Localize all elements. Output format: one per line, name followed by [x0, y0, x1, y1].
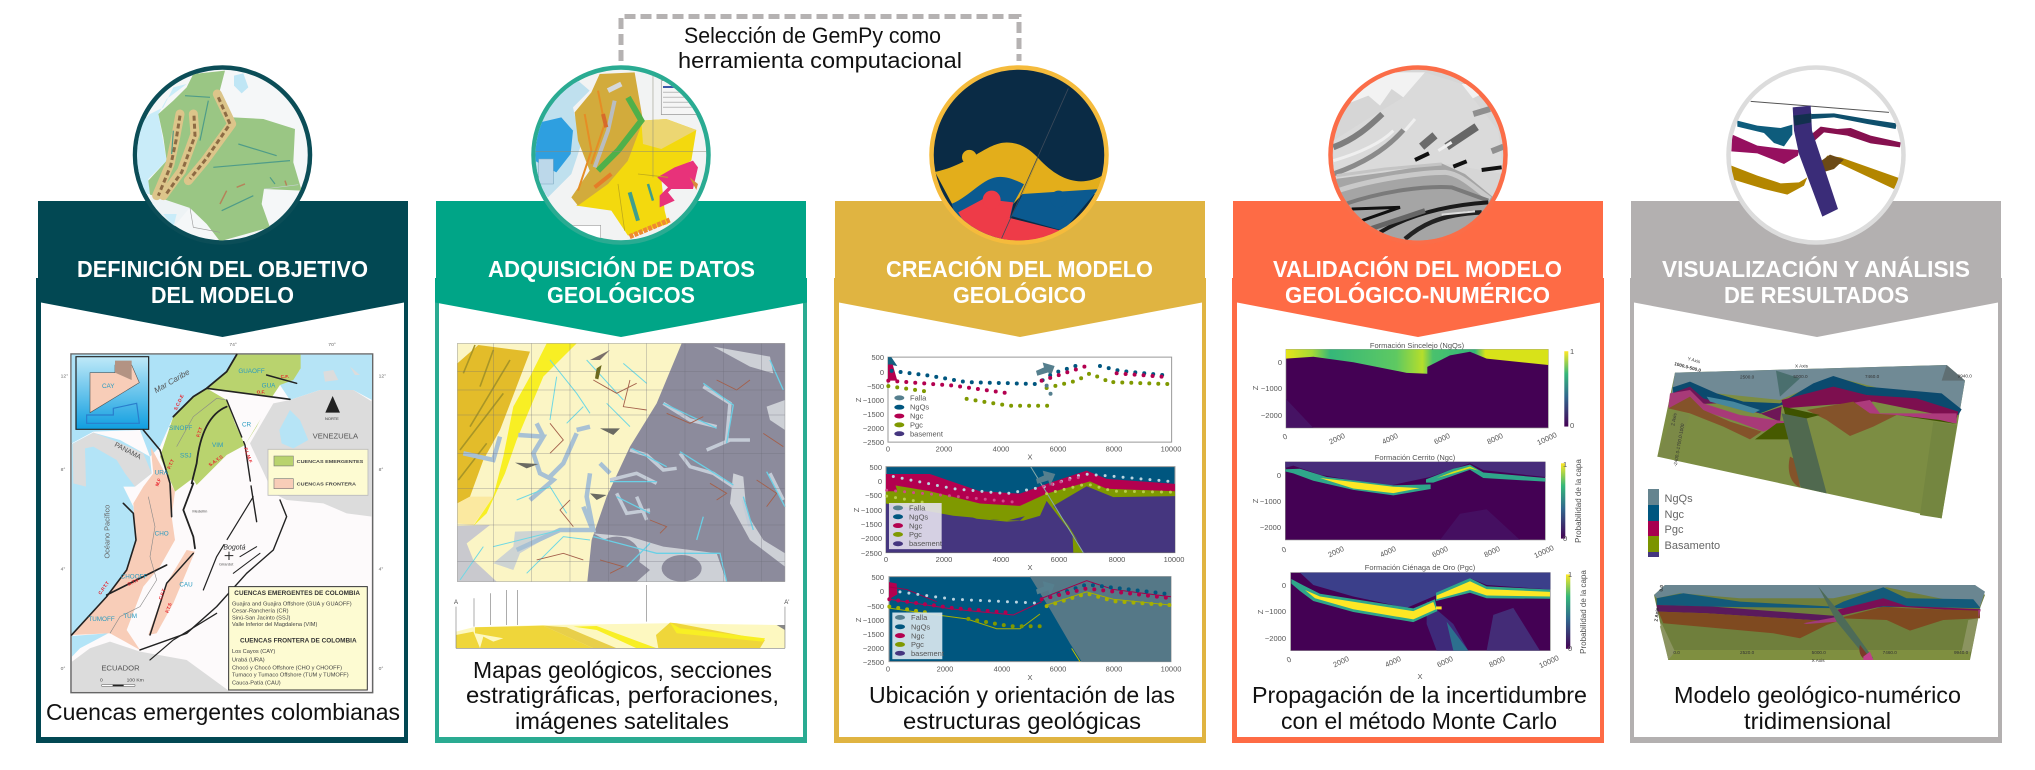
- chart: Cerrito probability: Formación Cerrito (Ngc): [1375, 453, 1456, 462]
- chart: Cerrito probability: 1: [1563, 460, 1567, 469]
- chart: interpolated layers: basement: [909, 539, 943, 548]
- caption: validation: Propagación de la incertidumbre: [1252, 682, 1587, 708]
- chart: interpolated layers: −2000: [861, 534, 882, 543]
- text box: basin list: Cauca-Patía (CAU): [232, 680, 281, 686]
- chart: interpolated layers: 4000: [993, 555, 1009, 564]
- chart: scalar field contour: 0: [880, 587, 884, 596]
- map: Colombian basins: 0°: [379, 666, 383, 672]
- chart: scalar field contour: Z: [854, 617, 863, 622]
- panel: geological model creation: [834, 68, 1206, 743]
- chart: scalar field contour: 8000: [1106, 664, 1122, 674]
- chart: input points: −2500: [863, 438, 884, 447]
- chart: interpolated layers: X: [1027, 563, 1033, 572]
- chart: input points: [854, 353, 1181, 462]
- chart: geological cross-section: A': [784, 600, 789, 606]
- chart: Sincelejo probability: 8000: [1485, 431, 1504, 446]
- caption: validation: con el método Monte Carlo: [1281, 708, 1557, 734]
- chart: Cerrito probability: 0: [1563, 534, 1567, 543]
- chart: scalar field contour: −2500: [863, 658, 884, 667]
- panel: visualization: [1630, 68, 2002, 743]
- chart: Sincelejo probability: 4000: [1380, 431, 1399, 446]
- panel: model validation: [1232, 68, 1604, 743]
- chart: interpolated layers: NgQs: [909, 512, 928, 522]
- map: Colombian basins: TUMOFF: [88, 616, 115, 623]
- panel frame: [435, 278, 807, 743]
- icon: 3D layers and fault: [1728, 68, 1904, 242]
- map: Colombian basins: CHO: [155, 531, 169, 538]
- chart: interpolated layers: 0: [884, 555, 888, 564]
- map: Colombian basins: 74°: [229, 342, 237, 348]
- chart: Ciénaga de Oro probability: 4000: [1383, 654, 1402, 669]
- chart: Sincelejo probability: Formación Sincelejo (NgQs): [1370, 341, 1465, 350]
- chart: Ciénaga de Oro probability: 8000: [1487, 654, 1506, 669]
- chart: input points: 8000: [1106, 444, 1122, 454]
- chart: Sincelejo probability: −2000: [1261, 411, 1282, 420]
- text box: basin list: Chocó y Chocó Offshore (CHO y CHOOFF): [232, 666, 342, 672]
- chart: Ciénaga de Oro probability: Z: [1256, 609, 1265, 614]
- icon: grey folded strata: [1330, 68, 1506, 242]
- chart: Ciénaga de Oro probability: [1256, 563, 1588, 681]
- chart: Sincelejo probability: Z: [1251, 385, 1260, 390]
- map: Colombian basins: Girardot: [219, 561, 234, 566]
- chart: interpolated layers: [852, 463, 1184, 572]
- chart: interpolated layers: 8000: [1109, 555, 1125, 564]
- map: Colombian basins: 70°: [328, 342, 336, 348]
- map: Colombian basins: NORTE: [325, 416, 339, 421]
- chart: Sincelejo probability: 0: [1281, 432, 1289, 442]
- chart: input points: −2000: [863, 424, 884, 433]
- chart: Sincelejo probability: 6000: [1432, 431, 1451, 446]
- legend: formations: Ngc: [1664, 509, 1685, 521]
- chart: interpolated layers: 10000: [1164, 555, 1184, 564]
- chart: scalar field contour: 10000: [1161, 664, 1181, 674]
- chart: 3D model: 2500.0: [1740, 375, 1755, 380]
- chart: Cerrito probability: −2000: [1260, 523, 1281, 532]
- caption: data acquisition: [466, 657, 779, 734]
- map: Colombian basins: 4°: [61, 566, 65, 572]
- chart: input points: 2000: [936, 444, 952, 454]
- legend: basins: [268, 449, 368, 495]
- map: Colombian basins: 4°: [379, 566, 383, 572]
- map: Colombian basins: G.T.V: [127, 577, 140, 587]
- chart: scalar field contour: 6000: [1050, 664, 1066, 674]
- caption: data acquisition: Mapas geológicos, secciones: [473, 657, 772, 683]
- legend: basins: CUENCAS FRONTERA: [297, 482, 356, 488]
- map: Colombian basins: 8°: [379, 467, 383, 473]
- icon: geological map of Colombia: [531, 67, 708, 242]
- map: Colombian basins: SINOFF: [169, 425, 192, 432]
- chart: interpolated layers: 500: [869, 463, 882, 472]
- legend: formations: Basamento: [1664, 540, 1720, 552]
- text: GemPy selection note: herramienta computacional: [678, 48, 962, 73]
- chart: 3D model: 5000.0: [1793, 374, 1808, 379]
- chart: 3D model: [1657, 356, 1972, 518]
- chart: Ciénaga de Oro probability: 0: [1285, 655, 1293, 665]
- chart: scalar field contour: 500: [871, 573, 884, 582]
- map: Colombian basins: 100 Km: [127, 677, 144, 683]
- map: Colombian basins: CR: [242, 421, 252, 428]
- chart: interpolated layers: −1000: [861, 506, 882, 515]
- chart: 3D model bottom: 0.0: [1673, 650, 1680, 655]
- map: Colombian basins: Bogotá: [223, 544, 246, 551]
- chart: 3D model: Z Axis: [1670, 412, 1678, 426]
- heading: validation: GEOLÓGICO-NUMÉRICO: [1285, 281, 1550, 308]
- chart: input points: 0: [886, 444, 890, 454]
- chart: Cerrito probability: 0: [1280, 545, 1288, 555]
- map: Colombian basins: 8°: [61, 467, 65, 473]
- map: Colombian basins: VENEZUELA: [313, 432, 359, 441]
- text: GemPy selection note: [678, 23, 962, 73]
- chart: interpolated layers: 6000: [1051, 555, 1067, 564]
- caption: model creation: [869, 682, 1175, 734]
- chart: input points: 10000: [1161, 444, 1181, 454]
- caption: validation: [1252, 682, 1587, 734]
- map: Colombian basins: 12°: [379, 374, 386, 380]
- map: Colombian basins: CAY: [102, 383, 115, 390]
- chart: Cerrito probability: 8000: [1482, 544, 1501, 559]
- text: GemPy selection note: Selección de GemPy como: [684, 23, 941, 48]
- chart: scalar field contour: 0: [886, 664, 890, 674]
- map: Colombian basins: S.A.Y.S: [208, 454, 224, 467]
- chart: input points: Falla: [910, 394, 927, 402]
- chart: 3D model bottom: 5000.0: [1812, 650, 1826, 655]
- map: Colombian basins: 12°: [61, 374, 68, 380]
- icon: GemPy logo layers: [932, 68, 1108, 248]
- chart: 3D model bottom: 2520.0: [1740, 650, 1755, 655]
- chart: scalar field contour: NgQs: [911, 622, 930, 632]
- chart: Ciénaga de Oro probability: Probabilidad de la capa: [1579, 570, 1588, 654]
- chart: geological cross-section: [454, 585, 789, 648]
- legend: formations: NgQs: [1664, 493, 1693, 505]
- chart: input points: −1000: [863, 396, 884, 405]
- chart: scalar field contour: −1000: [863, 616, 884, 625]
- chart: Cerrito probability: [1251, 453, 1583, 560]
- caption: data acquisition: estratigráficas, perforaciones,: [466, 682, 779, 708]
- chart: interpolated layers: Ngc: [909, 522, 923, 530]
- caption: model creation: Ubicación y orientación de las: [869, 682, 1175, 708]
- panel: definition of objective: [36, 68, 408, 743]
- chart: 3D model: 1000.0-500.0: [1674, 361, 1702, 373]
- chart: 3D model bottom: Z Axis: [1654, 607, 1660, 622]
- chart: scalar field contour: 4000: [994, 664, 1010, 674]
- chart: Cerrito probability: 0: [1277, 471, 1281, 480]
- chart: scalar field contour: −500: [867, 602, 884, 611]
- map: Colombian basins: C.F.: [281, 374, 289, 379]
- chart: input points: 0: [880, 368, 884, 377]
- panel: data acquisition: [435, 67, 807, 743]
- chart: scalar field contour: Pgc: [911, 640, 924, 649]
- chart: input points: Z: [854, 397, 863, 402]
- chart: interpolated layers: −1500: [861, 520, 882, 529]
- heading: data acquisition: ADQUISICIÓN DE DATOS: [488, 255, 755, 282]
- chart: 3D model: -2400.0-1700.0-1000: [1673, 423, 1685, 467]
- chart: Ciénaga de Oro probability: Formación Ciénaga de Oro (Pgc): [1365, 563, 1476, 572]
- map: Colombian basins: ECUADOR: [101, 664, 140, 673]
- chart: scalar field contour: Falla: [911, 613, 928, 622]
- chart: Ciénaga de Oro probability: X: [1417, 672, 1423, 681]
- map: Colombian basins: Océano Pacífico: [102, 505, 111, 559]
- chart: scalar field contour: Ngc: [911, 632, 925, 640]
- chart: Ciénaga de Oro probability: 0: [1568, 644, 1572, 653]
- chart: interpolated layers: 2000: [936, 555, 952, 564]
- chart: scalar field contour: −1500: [863, 630, 884, 639]
- chart: scalar field contour: 2000: [937, 664, 953, 674]
- chart: input points: NgQs: [910, 402, 929, 412]
- chart: input points: −1500: [863, 410, 884, 419]
- chart: scalar field contour: −2000: [863, 644, 884, 653]
- map: Colombian basins: M.F: [155, 478, 162, 487]
- chart: Sincelejo probability: 1: [1570, 347, 1574, 356]
- chart: Sincelejo probability: 0: [1570, 421, 1574, 430]
- legend: formations: Pgc: [1664, 524, 1684, 536]
- text box: basin list: Tumaco y Tumaco Offshore (TUM y TUMOFF): [232, 673, 349, 679]
- caption: visualization: tridimensional: [1744, 708, 1891, 734]
- chart: Cerrito probability: 4000: [1378, 544, 1397, 559]
- map: Colombian basins: TUM: [123, 613, 137, 620]
- chart: input points: 500: [871, 353, 884, 362]
- chart: 3D model: X Axis: [1795, 364, 1809, 369]
- caption: model creation: estructuras geológicas: [903, 708, 1141, 734]
- chart: input points: basement: [910, 430, 944, 438]
- chart: input points: Ngc: [910, 412, 924, 420]
- chart: 3D model bottom: 9940.0: [1954, 650, 1969, 655]
- chart: Cerrito probability: 6000: [1430, 544, 1449, 559]
- chart: Cerrito probability: 10000: [1533, 543, 1555, 560]
- chart: Sincelejo probability: 0: [1278, 358, 1282, 367]
- map: Colombian basins: URA: [155, 470, 169, 477]
- chart: scalar field contour: X: [1027, 673, 1033, 682]
- chart: scalar field contour: basement: [911, 649, 945, 658]
- map: Colombian basins: 0°: [61, 666, 65, 672]
- chart: input points: X: [1027, 452, 1033, 462]
- heading: visualization: [1662, 255, 1970, 308]
- map: Colombian basins: F.T.S: [165, 602, 173, 614]
- chart: Sincelejo probability: 2000: [1327, 431, 1346, 446]
- text box: basin list: Valle Inferior del Magdalena (VIM): [232, 622, 318, 628]
- chart: Ciénaga de Oro probability: 2000: [1331, 654, 1350, 669]
- map: Colombian basins: GUA: [262, 383, 276, 390]
- map: Colombian basins: F.L.M.F: [243, 447, 253, 464]
- map: Colombian basins: Mar Caribe: [152, 367, 192, 395]
- map: Colombian basins: [61, 342, 386, 693]
- panel frame: [1232, 201, 1604, 743]
- chart: Sincelejo probability: −1000: [1261, 384, 1282, 393]
- panel frame: [1630, 201, 2002, 743]
- text box: basin list: Guajira and Guajira Offshore (GUA y GUAOFF): [232, 601, 352, 607]
- map: Colombian basins: PANAMA: [113, 442, 142, 462]
- map: Colombian basins: VIM: [212, 442, 223, 449]
- heading: model creation: GEOLÓGICO: [953, 281, 1086, 308]
- chart: 3D model: Y Axis: [1687, 356, 1701, 364]
- chart: Cerrito probability: Z: [1251, 498, 1260, 503]
- chart: 3D model: 7460.0: [1865, 374, 1880, 379]
- legend: formations: [1648, 489, 1720, 557]
- map: Colombian basins: Medellín: [192, 509, 207, 514]
- chart: Ciénaga de Oro probability: 10000: [1538, 653, 1560, 670]
- heading: visualization: VISUALIZACIÓN Y ANÁLISIS: [1662, 255, 1970, 282]
- panel frame: [36, 201, 408, 743]
- caption: definition: Cuencas emergentes colombianas: [46, 699, 400, 725]
- text box: basin list: Urabá (URA): [232, 657, 265, 663]
- map: Colombian basins: C.P.T.T: [97, 580, 110, 596]
- chart: interpolated layers: Pgc: [909, 530, 922, 539]
- heading: definition: DEFINICIÓN DEL OBJETIVO: [77, 255, 368, 282]
- heading: definition: DEL MODELO: [151, 282, 294, 308]
- chart: scalar field contour: [854, 573, 1181, 682]
- map: Colombian basins: SSJ: [180, 453, 192, 460]
- chart: interpolated layers: Z: [852, 507, 861, 512]
- chart: Sincelejo probability: 10000: [1536, 430, 1558, 447]
- chart: geological cross-section: A: [454, 600, 458, 606]
- map: Colombian basins: S.C.D.E: [173, 394, 185, 411]
- map: Colombian basins: CAU: [179, 582, 193, 589]
- map: geological map: [457, 343, 785, 582]
- chart: input points: Pgc: [910, 420, 923, 430]
- chart: input points: −500: [867, 382, 884, 391]
- heading: validation: [1273, 255, 1562, 308]
- map: Colombian basins: O.F.: [257, 389, 265, 394]
- legend: basins: CUENCAS EMERGENTES: [297, 459, 364, 465]
- caption: data acquisition: imágenes satelitales: [515, 708, 729, 734]
- chart: Cerrito probability: Probabilidad de la capa: [1574, 459, 1583, 543]
- text box: basin list: Sinú-San Jacinto (SSJ): [232, 615, 291, 621]
- text box: basin list: [229, 587, 367, 690]
- chart: 3D model bottom: [1654, 584, 1985, 663]
- chart: 3D model: 9940.0: [1958, 373, 1972, 378]
- map: Colombian basins: 0: [100, 677, 103, 683]
- chart: Ciénaga de Oro probability: 0: [1282, 581, 1286, 590]
- chart: interpolated layers: −2500: [861, 549, 882, 558]
- heading: definition: [77, 255, 368, 308]
- chart: Sincelejo probability: [1251, 341, 1574, 447]
- map: Colombian basins: CHOOFF: [121, 574, 148, 581]
- map: Colombian basins: C.F.T: [158, 588, 166, 600]
- text box: basin list: Cesar-Ranchería (CR): [232, 608, 289, 614]
- chart: 3D model bottom: 7460.0: [1883, 650, 1897, 655]
- chart: interpolated layers: 0: [878, 477, 882, 486]
- text box: basin list: CUENCAS FRONTERA DE COLOMBIA: [240, 639, 357, 645]
- chart: interpolated layers: Falla: [909, 504, 926, 512]
- text box: basin list: Los Cayos (CAY): [232, 649, 275, 655]
- chart: Ciénaga de Oro probability: −2000: [1265, 634, 1286, 643]
- map: Colombian basins: GUAOFF: [238, 368, 265, 375]
- map: Colombian basins: F.T.T: [196, 426, 203, 438]
- chart: Cerrito probability: 2000: [1326, 544, 1345, 559]
- heading: model creation: [886, 255, 1153, 308]
- map: Colombian basins: F.T.T: [166, 458, 175, 470]
- chart: Cerrito probability: −1000: [1260, 497, 1281, 506]
- heading: model creation: CREACIÓN DEL MODELO: [886, 255, 1153, 282]
- heading: data acquisition: GEOLÓGICOS: [547, 281, 695, 308]
- text box: basin list: CUENCAS EMERGENTES DE COLOMBIA: [234, 591, 361, 597]
- chart: Ciénaga de Oro probability: 1: [1568, 570, 1572, 579]
- heading: validation: VALIDACIÓN DEL MODELO: [1273, 255, 1562, 282]
- chart: Ciénaga de Oro probability: −1000: [1265, 607, 1286, 616]
- heading: data acquisition: [488, 255, 755, 308]
- connector: GemPy selection bracket: [621, 16, 1019, 73]
- caption: visualization: [1674, 682, 1961, 734]
- chart: Ciénaga de Oro probability: 6000: [1435, 654, 1454, 669]
- icon: relief map of Colombia: [133, 68, 310, 242]
- chart: 3D model bottom: 0.0: [1659, 584, 1664, 592]
- chart: input points: 6000: [1050, 444, 1066, 454]
- heading: visualization: DE RESULTADOS: [1724, 282, 1909, 308]
- panel frame: [834, 201, 1206, 743]
- chart: input points: 4000: [993, 444, 1009, 454]
- caption: visualization: Modelo geológico-numérico: [1674, 682, 1961, 708]
- chart: interpolated layers: −500: [865, 491, 882, 500]
- chart: 3D model bottom: X Axis: [1812, 658, 1825, 663]
